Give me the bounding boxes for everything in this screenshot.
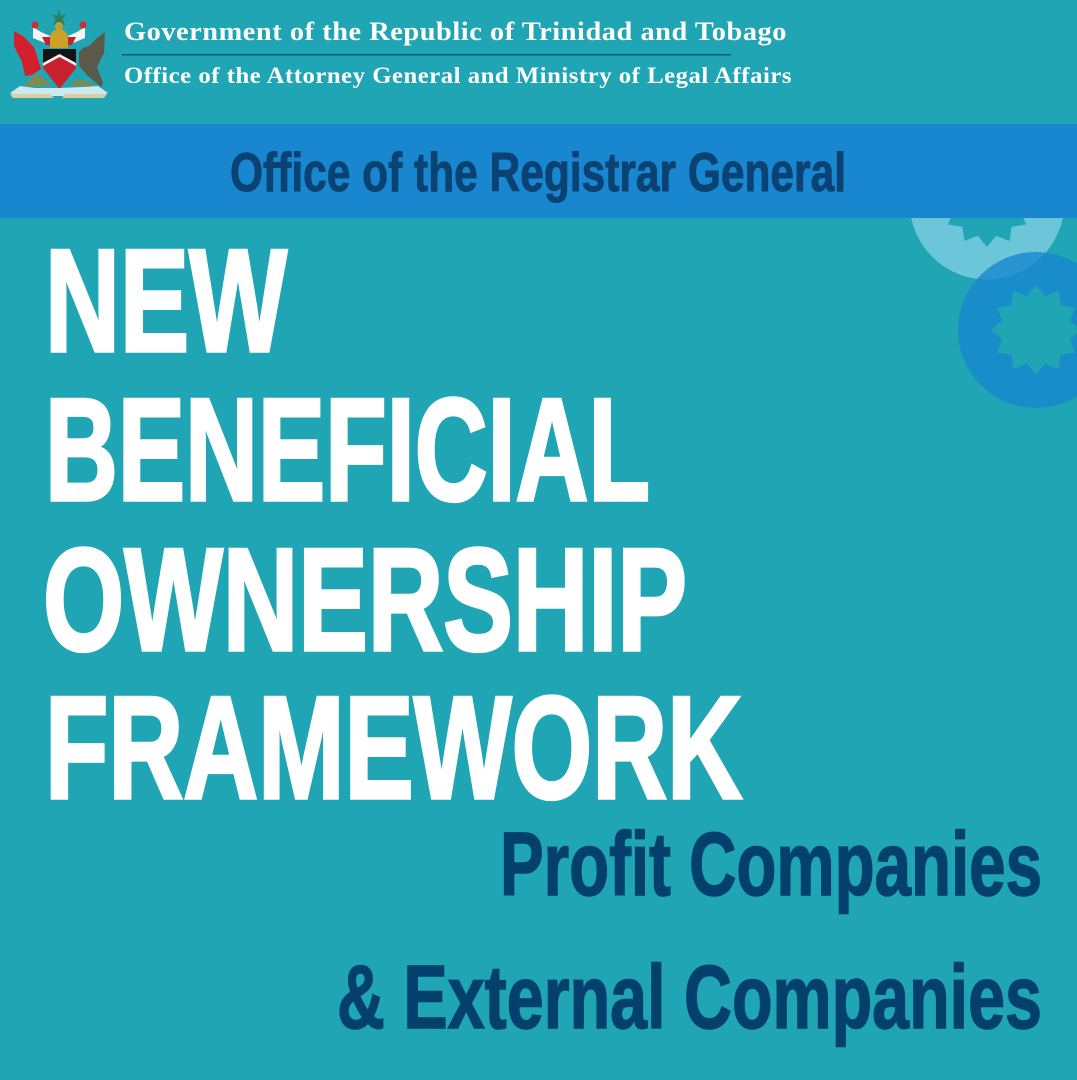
decorative badge: blue circle with star bbox=[958, 252, 1077, 408]
header title: Government of the Republic of Trinidad and Tobago bbox=[124, 17, 787, 46]
subheading: company types bbox=[337, 815, 1042, 1048]
icon: coat of arms bbox=[10, 9, 108, 98]
decorative badge: light circle with star bbox=[910, 124, 1064, 280]
header subtitle: Office of the Attorney General and Ministry of Legal Affairs bbox=[124, 63, 792, 88]
banner: Office of the Registrar General bbox=[0, 124, 1077, 218]
main heading: NEW bbox=[45, 219, 287, 382]
header divider bbox=[122, 54, 731, 56]
banner: Office of the Registrar General: Office of the Registrar General bbox=[230, 141, 846, 203]
main heading bbox=[43, 219, 742, 829]
main heading: BENEFICIAL bbox=[45, 368, 650, 531]
main heading: FRAMEWORK bbox=[45, 666, 742, 829]
main heading: OWNERSHIP bbox=[43, 518, 687, 681]
